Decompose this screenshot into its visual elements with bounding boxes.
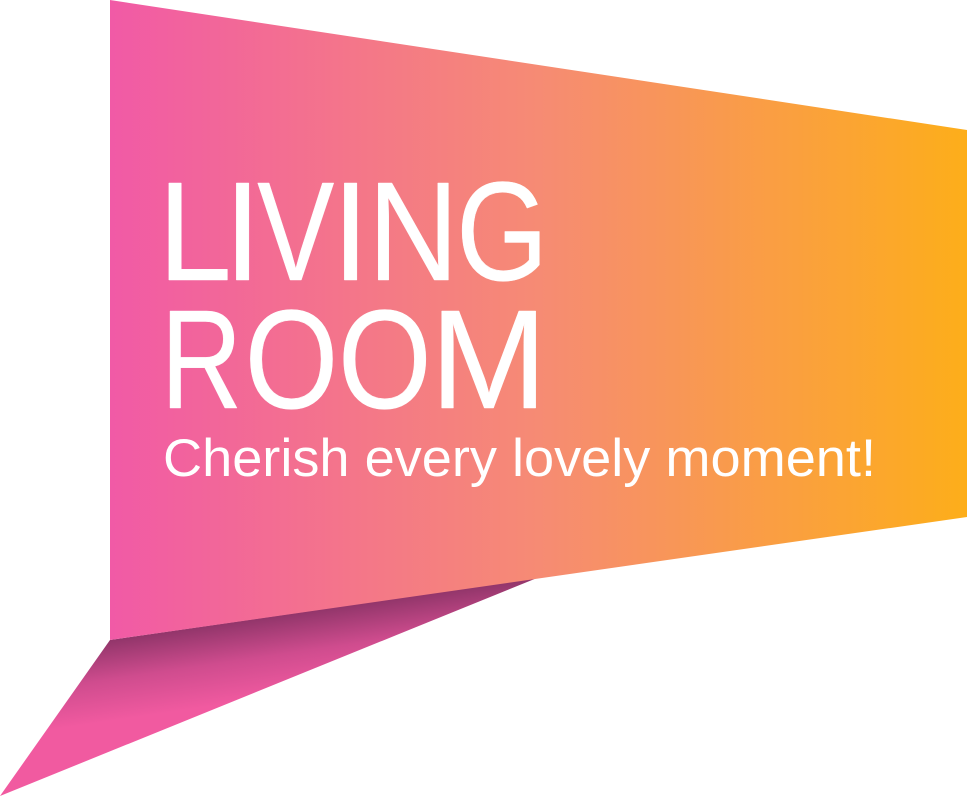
title: I — [224, 152, 261, 310]
folded ribbon tail — [0, 578, 537, 796]
title: G — [456, 152, 548, 310]
title: I — [332, 152, 369, 310]
title: V — [257, 152, 334, 310]
title: L — [158, 152, 232, 310]
title: R — [161, 280, 242, 438]
main gradient banner — [110, 0, 967, 640]
title: M — [430, 280, 547, 438]
tagline: Cherish every lovely moment! — [163, 429, 876, 488]
title: N — [368, 152, 459, 310]
title: O — [245, 280, 338, 438]
title: O — [338, 280, 432, 438]
title — [158, 152, 548, 438]
